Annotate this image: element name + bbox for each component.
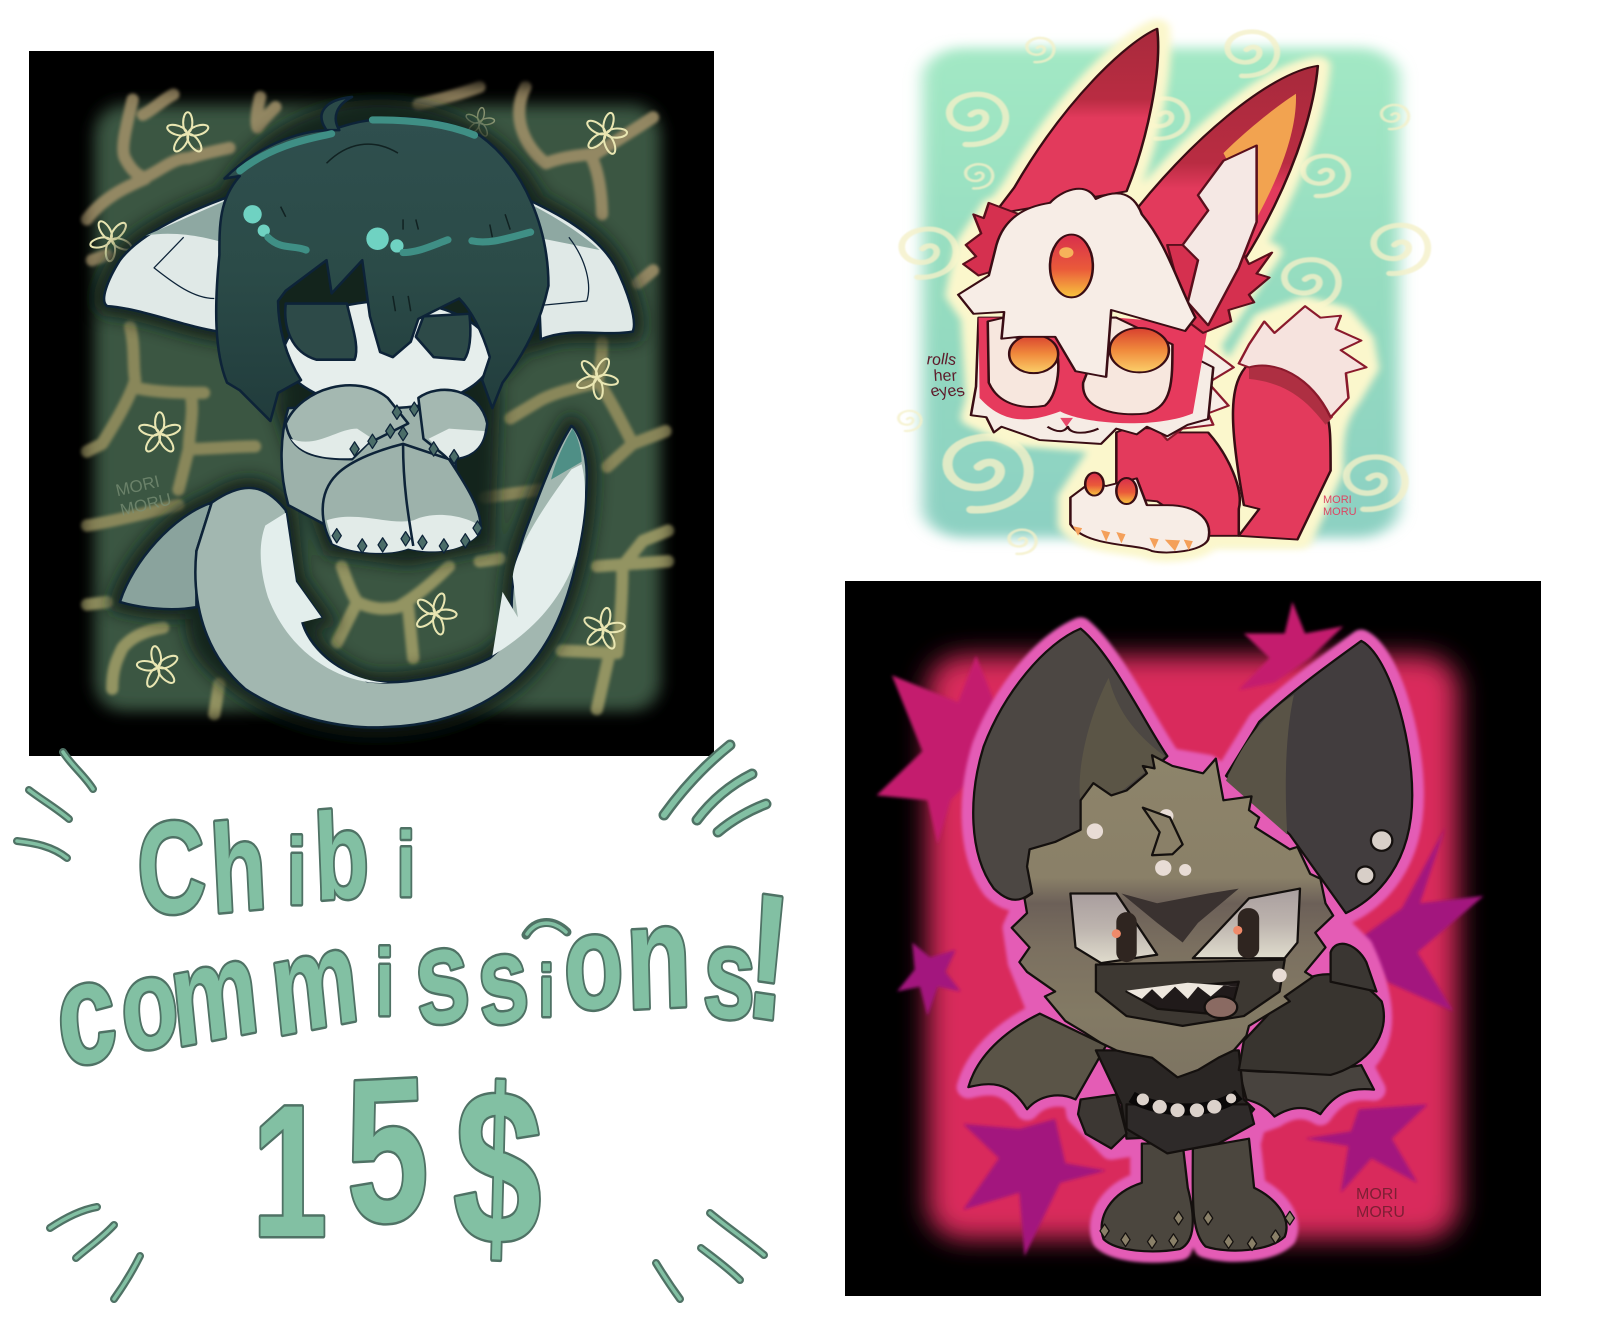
torso — [1096, 1050, 1254, 1139]
paw claws — [1073, 526, 1193, 551]
right ear — [1226, 641, 1412, 913]
left ear — [103, 196, 226, 332]
signature: MORI MORU: MORI — [1356, 1186, 1398, 1203]
white muzzle — [283, 301, 492, 408]
heading: Chibi: i — [397, 812, 415, 916]
burst outlines — [17, 745, 766, 1299]
raised arm — [1239, 974, 1384, 1075]
tan root cracks — [87, 87, 668, 714]
legs — [1102, 1144, 1193, 1251]
handwritten note: rolls her eyes: her — [933, 367, 958, 385]
left eye — [1070, 893, 1157, 963]
tail tip teal — [551, 429, 582, 480]
black panel frame — [29, 51, 714, 756]
left wing — [968, 1014, 1106, 1109]
heading: commissions!: o — [560, 884, 627, 1040]
left ear — [973, 629, 1167, 900]
bat character — [968, 629, 1412, 1251]
nose and mouth — [1047, 427, 1098, 433]
lower face — [971, 318, 1213, 444]
bat artwork drawing — [877, 602, 1484, 1256]
paws — [1070, 478, 1209, 553]
teal backdrop — [922, 48, 1399, 538]
title lettering: Chibi commissions! 15$ — [49, 785, 797, 1292]
cream spirals — [899, 32, 1428, 554]
tail dark band — [1249, 365, 1333, 425]
price: 15$: 5 — [343, 1033, 431, 1267]
fur highlights — [1087, 809, 1287, 982]
panel: bat chibi artwork — [845, 581, 1541, 1296]
right eye — [1083, 318, 1172, 414]
body — [1116, 428, 1240, 536]
feet — [323, 444, 481, 553]
black panel frame — [845, 581, 1541, 1296]
ahoge tuft — [322, 97, 352, 130]
skirt — [1127, 1104, 1254, 1153]
heading: commissions!: o — [114, 926, 184, 1080]
left hand — [1078, 1095, 1127, 1148]
hands — [286, 385, 408, 459]
red side fur left — [963, 203, 1019, 276]
heading: commissions!: i — [539, 952, 554, 1032]
toe claws — [332, 521, 482, 553]
heading: commissions!: i — [375, 929, 394, 1036]
clipped bat artwork — [877, 602, 1484, 1256]
heading: commissions!: c — [49, 926, 123, 1099]
pink halo — [968, 629, 1412, 1251]
foot claws — [1100, 1211, 1294, 1250]
heading: Chibi: C — [134, 793, 209, 945]
heading: Chibi: h — [207, 795, 269, 940]
left eye — [988, 318, 1058, 407]
right ear inner fold — [1226, 695, 1294, 835]
heading: commissions!: n — [624, 873, 693, 1041]
handwritten note: rolls her eyes: eyes — [928, 382, 967, 401]
chest fluff — [1157, 344, 1234, 440]
spiked collar — [1132, 1095, 1239, 1110]
red face mask — [979, 318, 1208, 423]
right ear — [532, 200, 636, 340]
collar beads — [1137, 1094, 1236, 1117]
head fluff — [958, 189, 1195, 377]
right ear — [1127, 66, 1318, 321]
pupils — [1116, 912, 1137, 962]
muzzle — [1096, 960, 1285, 1026]
crimson backdrop — [928, 656, 1458, 1239]
tongue — [1205, 996, 1237, 1018]
hair strand lines — [281, 144, 510, 311]
cream flowers — [82, 105, 632, 691]
heading: commissions!: s — [409, 897, 474, 1055]
tail tip — [1239, 306, 1366, 417]
torso — [282, 403, 459, 526]
heading: Chibi: b — [312, 785, 371, 926]
fox character — [958, 29, 1366, 553]
left iris — [1009, 335, 1058, 373]
teeth — [1127, 983, 1239, 999]
panel: red fox chibi artwork — [899, 29, 1428, 554]
ear studs — [1371, 830, 1392, 851]
signature: MORI MORU: MORU — [1323, 506, 1357, 518]
heading: commissions!: m — [264, 899, 364, 1064]
hand claws — [350, 402, 459, 464]
magenta stars — [877, 602, 1484, 1256]
soft edge vignette — [61, 66, 694, 740]
left eye — [285, 304, 356, 360]
handwritten note: rolls her eyes: rolls — [925, 351, 957, 370]
teal highlights — [243, 205, 404, 253]
burst strokes around lettering — [17, 745, 766, 1299]
character shadow — [104, 110, 634, 727]
signature: MORI MORU: MORU — [1356, 1204, 1405, 1221]
signature: MORI MORU: MORI — [114, 472, 161, 500]
tail white belly — [261, 513, 388, 683]
hand white shading — [291, 429, 485, 458]
feet center line — [403, 444, 413, 546]
signature: MORI MORU: MORU — [118, 490, 173, 520]
heading: commissions!: m — [163, 910, 264, 1075]
price: 15$: 1 — [252, 1066, 327, 1276]
mouth — [1127, 982, 1239, 1014]
right iris — [1110, 328, 1169, 372]
ear inner lines — [154, 237, 589, 305]
burst fills — [17, 745, 766, 1299]
panel: shark chibi artwork — [29, 51, 714, 756]
shark character — [104, 97, 634, 727]
raised hand — [1331, 944, 1377, 992]
left ear inner fold — [1080, 678, 1165, 820]
inner ear fluff — [1183, 145, 1257, 325]
brow fur — [1121, 889, 1239, 943]
heading: commissions!: s — [701, 899, 758, 1048]
hat stroke over the i — [526, 923, 567, 935]
feet white toes — [327, 515, 480, 553]
right eye — [416, 314, 470, 360]
paw gems — [1085, 473, 1104, 496]
tail body — [195, 426, 587, 727]
clipped shark artwork — [61, 66, 694, 740]
left ear — [994, 29, 1158, 214]
tail — [1233, 362, 1331, 540]
shark artwork drawing — [61, 66, 694, 740]
tail white fin — [492, 464, 585, 656]
red side fur right — [1167, 245, 1272, 333]
mossy green backdrop — [94, 105, 661, 712]
right wing — [1239, 1065, 1374, 1117]
right eye — [1193, 889, 1300, 958]
heading: commissions!: s — [472, 907, 533, 1053]
price: 15$: $ — [451, 1041, 545, 1292]
hair — [216, 118, 548, 421]
head fur — [1012, 755, 1333, 1077]
heading: Chibi: i — [287, 818, 306, 925]
fox artwork drawing — [899, 29, 1428, 554]
cream halo — [958, 29, 1366, 553]
heading: commissions!: ! — [739, 855, 797, 1059]
orange inner ear — [1223, 94, 1296, 218]
forehead gem — [1050, 235, 1093, 297]
signature: MORI MORU: MORI — [1323, 494, 1352, 506]
forelock — [1143, 808, 1183, 855]
tail fin left — [120, 503, 212, 609]
